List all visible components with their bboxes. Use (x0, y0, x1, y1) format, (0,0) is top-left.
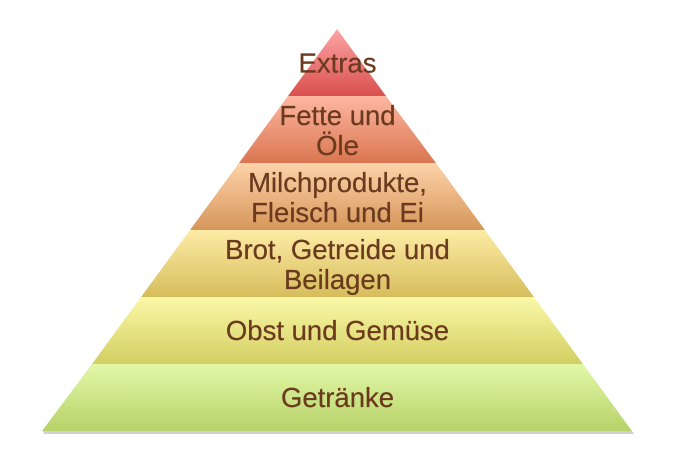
layer: Brot, Getreide und Beilagen: Beilagen (284, 264, 391, 295)
layer: Milchprodukte, Fleisch und Ei: Fleisch und Ei (251, 197, 424, 228)
layer: Fette und Öle: Fette und (279, 100, 396, 131)
layer: Extras: Extras (299, 48, 376, 78)
layer: Brot, Getreide und Beilagen (141, 230, 534, 297)
layer: Fette und Öle: Öle (316, 130, 359, 161)
layer: Getränke (42, 364, 632, 431)
layer: Brot, Getreide und Beilagen: Brot, Getreide und (225, 234, 450, 265)
layer: Fette und Öle (239, 96, 436, 163)
layer: Obst und Gemüse: Obst und Gemüse (226, 315, 449, 346)
layer: Extras (288, 29, 386, 96)
base shadow (43, 431, 634, 434)
layer: Milchprodukte, Fleisch und Ei: Milchprodukte, (248, 167, 427, 198)
layer: Getränke: Getränke (281, 382, 394, 413)
layer: Obst und Gemüse (92, 297, 583, 364)
layer: Milchprodukte, Fleisch und Ei (190, 163, 485, 230)
